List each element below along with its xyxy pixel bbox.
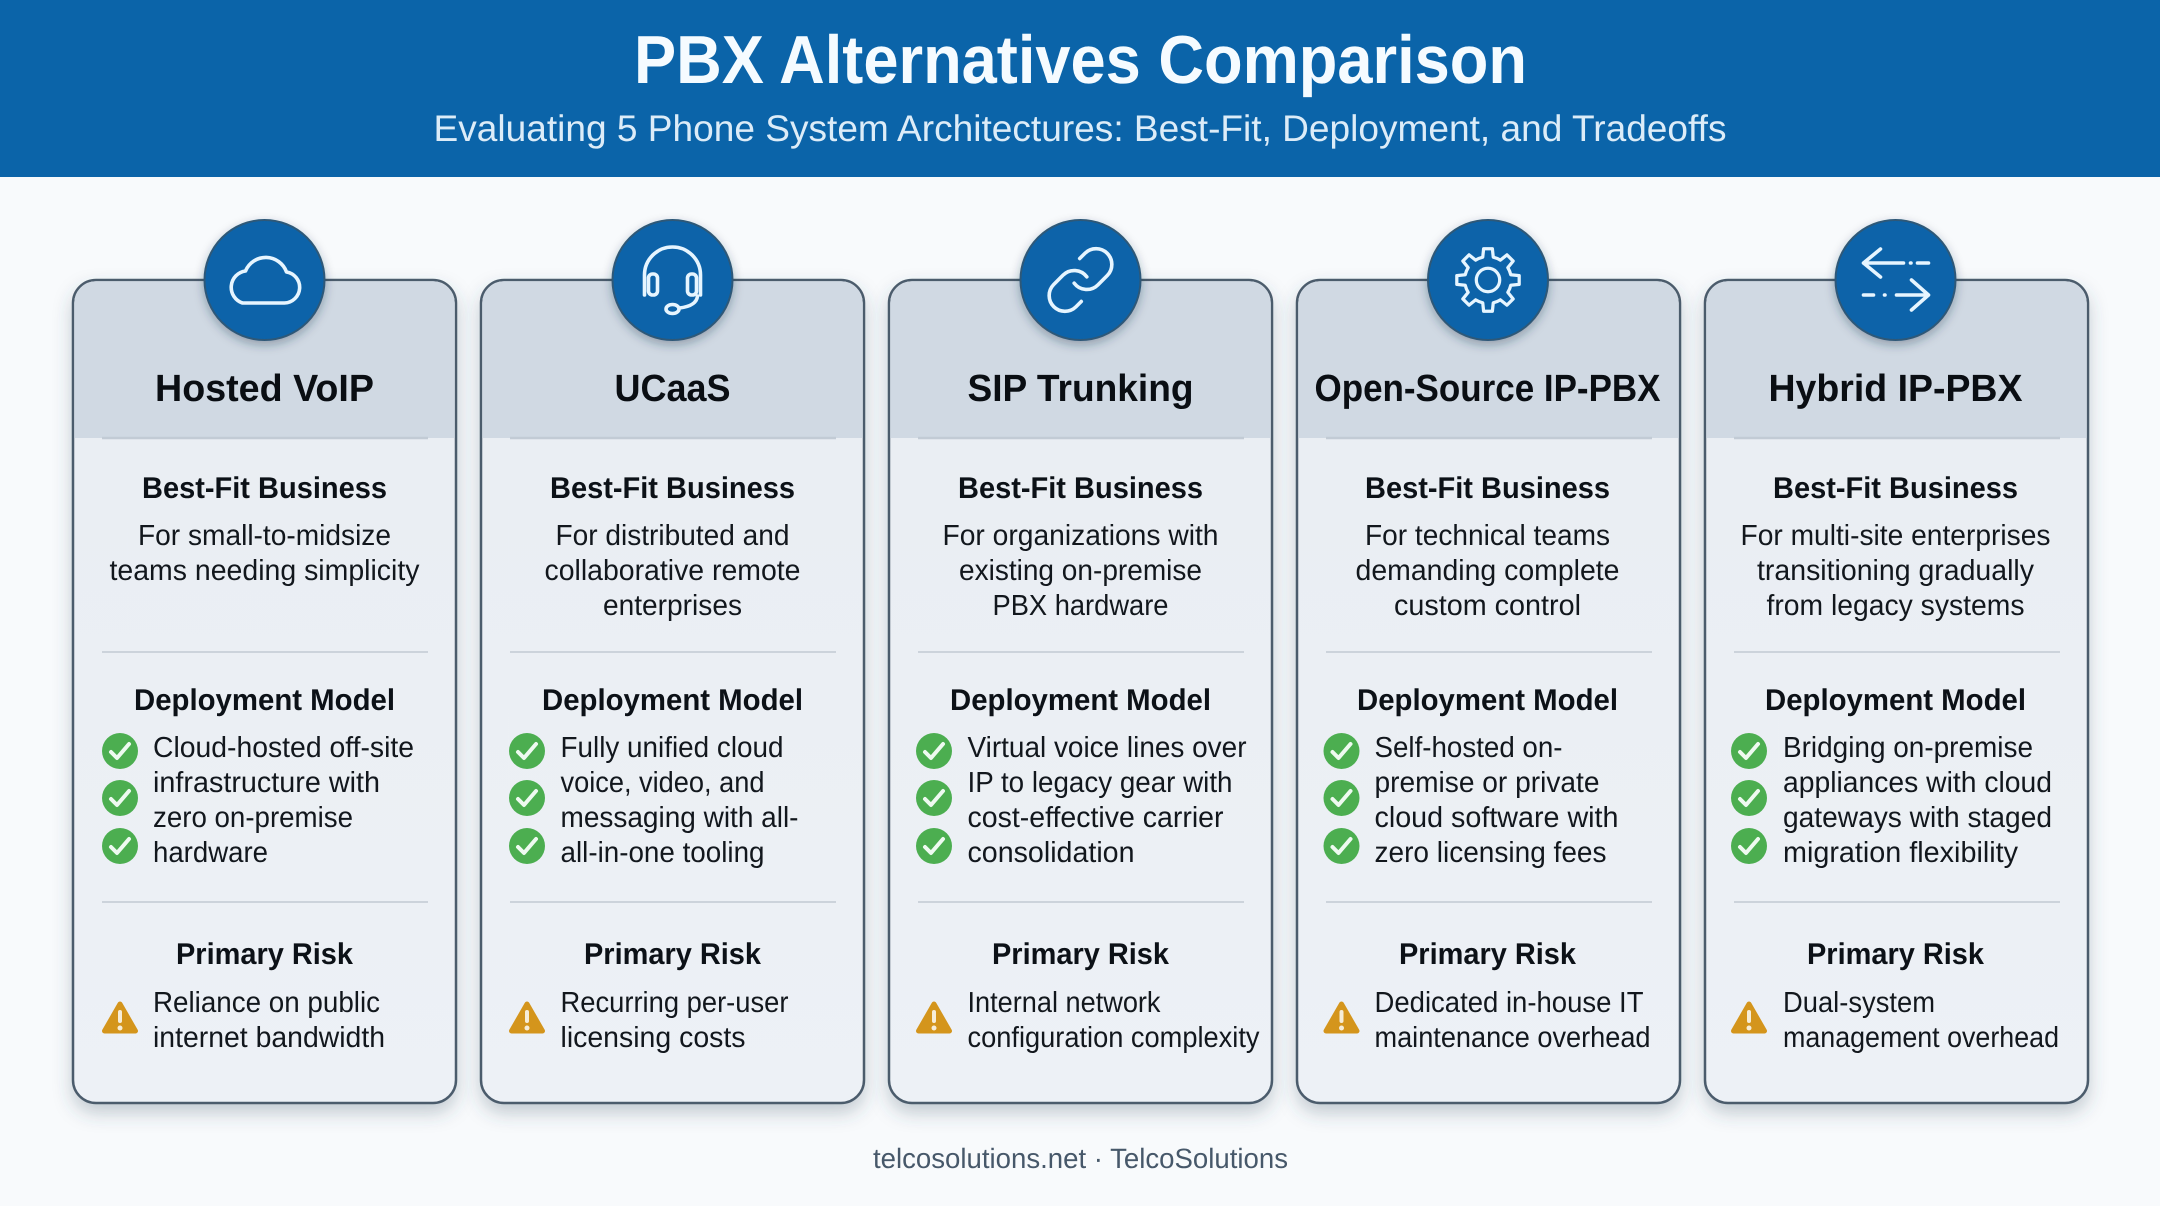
best-fit business section xyxy=(1740,472,2050,622)
primary risk section xyxy=(918,938,1260,1054)
heading: SIP Trunking: SIP Trunking xyxy=(968,368,1194,410)
best-fit business section: Best-Fit Business xyxy=(142,472,387,505)
deployment model section: Deployment Model xyxy=(542,684,803,717)
panel: Hybrid IP-PBX xyxy=(1705,220,2088,1103)
primary risk section: Internal network xyxy=(968,987,1161,1019)
deployment model section: zero licensing fees xyxy=(1374,837,1606,869)
deployment model section: messaging with all- xyxy=(560,802,798,834)
best-fit business section: For distributed and xyxy=(556,520,790,552)
deployment model section: Deployment Model xyxy=(1765,684,2026,717)
heading: UCaaS: UCaaS xyxy=(614,368,730,410)
deployment model section: Deployment Model xyxy=(1357,684,1618,717)
primary risk section: Primary Risk xyxy=(176,938,353,971)
header banner xyxy=(0,0,2160,177)
best-fit business section xyxy=(110,472,420,587)
primary risk section: licensing costs xyxy=(560,1022,746,1054)
primary risk section: Primary Risk xyxy=(992,938,1169,971)
best-fit business section: from legacy systems xyxy=(1766,590,2024,622)
primary risk section xyxy=(104,938,385,1054)
deployment model section xyxy=(102,684,414,869)
deployment model section xyxy=(916,684,1247,869)
panel: Hosted VoIP xyxy=(73,220,456,1103)
deployment model section: all-in-one tooling xyxy=(560,837,764,869)
heading: Open-Source IP-PBX: Open-Source IP-PBX xyxy=(1314,368,1661,410)
deployment model section xyxy=(509,684,803,869)
primary risk section: Dedicated in-house IT xyxy=(1374,987,1644,1019)
primary risk section: Primary Risk xyxy=(1807,938,1984,971)
deployment model section: Deployment Model xyxy=(950,684,1211,717)
deployment model section: cost-effective carrier xyxy=(968,802,1224,834)
best-fit business section: enterprises xyxy=(603,590,742,622)
best-fit business section: existing on-premise xyxy=(959,555,1202,587)
deployment model section: Cloud-hosted off-site xyxy=(153,732,414,764)
best-fit business section: For small-to-midsize xyxy=(138,520,391,552)
deployment model section xyxy=(1731,684,2052,869)
best-fit business section xyxy=(942,472,1218,622)
primary risk section: configuration complexity xyxy=(968,1022,1260,1054)
deployment model section: Fully unified cloud xyxy=(560,732,784,764)
best-fit business section xyxy=(544,472,800,622)
footer: telcosolutions.net · TelcoSolutions xyxy=(873,1143,1288,1174)
icon: gear xyxy=(1428,220,1548,340)
best-fit business section: Best-Fit Business xyxy=(1365,472,1610,505)
primary risk section: Primary Risk xyxy=(584,938,761,971)
primary risk section: maintenance overhead xyxy=(1374,1022,1650,1054)
best-fit business section: custom control xyxy=(1394,590,1581,622)
title: PBX Alternatives Comparison xyxy=(634,22,1527,98)
deployment model section: infrastructure with xyxy=(153,767,380,799)
deployment model section: Virtual voice lines over xyxy=(968,732,1247,764)
deployment model section: Deployment Model xyxy=(134,684,395,717)
deployment model section xyxy=(1324,684,1618,869)
best-fit business section: Best-Fit Business xyxy=(1773,472,2018,505)
deployment model section: gateways with staged xyxy=(1783,802,2052,834)
deployment model section: appliances with cloud xyxy=(1783,767,2052,799)
best-fit business section: PBX hardware xyxy=(992,590,1168,622)
deployment model section: voice, video, and xyxy=(560,767,764,799)
primary risk section: Primary Risk xyxy=(1399,938,1576,971)
panel: Open-Source IP-PBX xyxy=(1297,220,1680,1103)
primary risk section xyxy=(512,938,789,1054)
primary risk section xyxy=(1734,938,2059,1054)
best-fit business section: transitioning gradually xyxy=(1757,555,2034,587)
deployment model section: migration flexibility xyxy=(1783,837,2018,869)
deployment model section: Bridging on-premise xyxy=(1783,732,2033,764)
primary risk section xyxy=(1326,938,1650,1054)
best-fit business section: demanding complete xyxy=(1356,555,1620,587)
deployment model section: consolidation xyxy=(968,837,1134,869)
heading: Hybrid IP-PBX: Hybrid IP-PBX xyxy=(1768,368,2023,410)
best-fit business section: teams needing simplicity xyxy=(110,555,420,587)
best-fit business section xyxy=(1356,472,1620,622)
deployment model section: premise or private xyxy=(1374,767,1600,799)
panel: SIP Trunking xyxy=(889,220,1272,1103)
best-fit business section: For organizations with xyxy=(942,520,1218,552)
primary risk section: Dual-system xyxy=(1783,987,1935,1019)
subtitle: Evaluating 5 Phone System Architectures: Best-Fit, Deployment, and Tradeoffs xyxy=(434,108,1726,149)
deployment model section: cloud software with xyxy=(1374,802,1618,834)
primary risk section: internet bandwidth xyxy=(153,1022,385,1054)
primary risk section: management overhead xyxy=(1783,1022,2059,1054)
icon: headset xyxy=(612,220,732,340)
heading: Hosted VoIP: Hosted VoIP xyxy=(155,368,374,410)
best-fit business section: Best-Fit Business xyxy=(550,472,795,505)
deployment model section: hardware xyxy=(153,837,268,869)
icon: chain link xyxy=(1020,220,1140,340)
best-fit business section: Best-Fit Business xyxy=(958,472,1203,505)
best-fit business section: For technical teams xyxy=(1365,520,1610,552)
deployment model section: zero on-premise xyxy=(153,802,353,834)
primary risk section: Recurring per-user xyxy=(560,987,789,1019)
deployment model section: IP to legacy gear with xyxy=(968,767,1232,799)
deployment model section: Self-hosted on- xyxy=(1374,732,1562,764)
icon: bidirectional arrows xyxy=(1836,220,1956,340)
panel: UCaaS xyxy=(481,220,864,1103)
best-fit business section: For multi-site enterprises xyxy=(1740,520,2050,552)
best-fit business section: collaborative remote xyxy=(544,555,800,587)
icon: cloud xyxy=(204,220,324,340)
primary risk section: Reliance on public xyxy=(153,987,380,1019)
